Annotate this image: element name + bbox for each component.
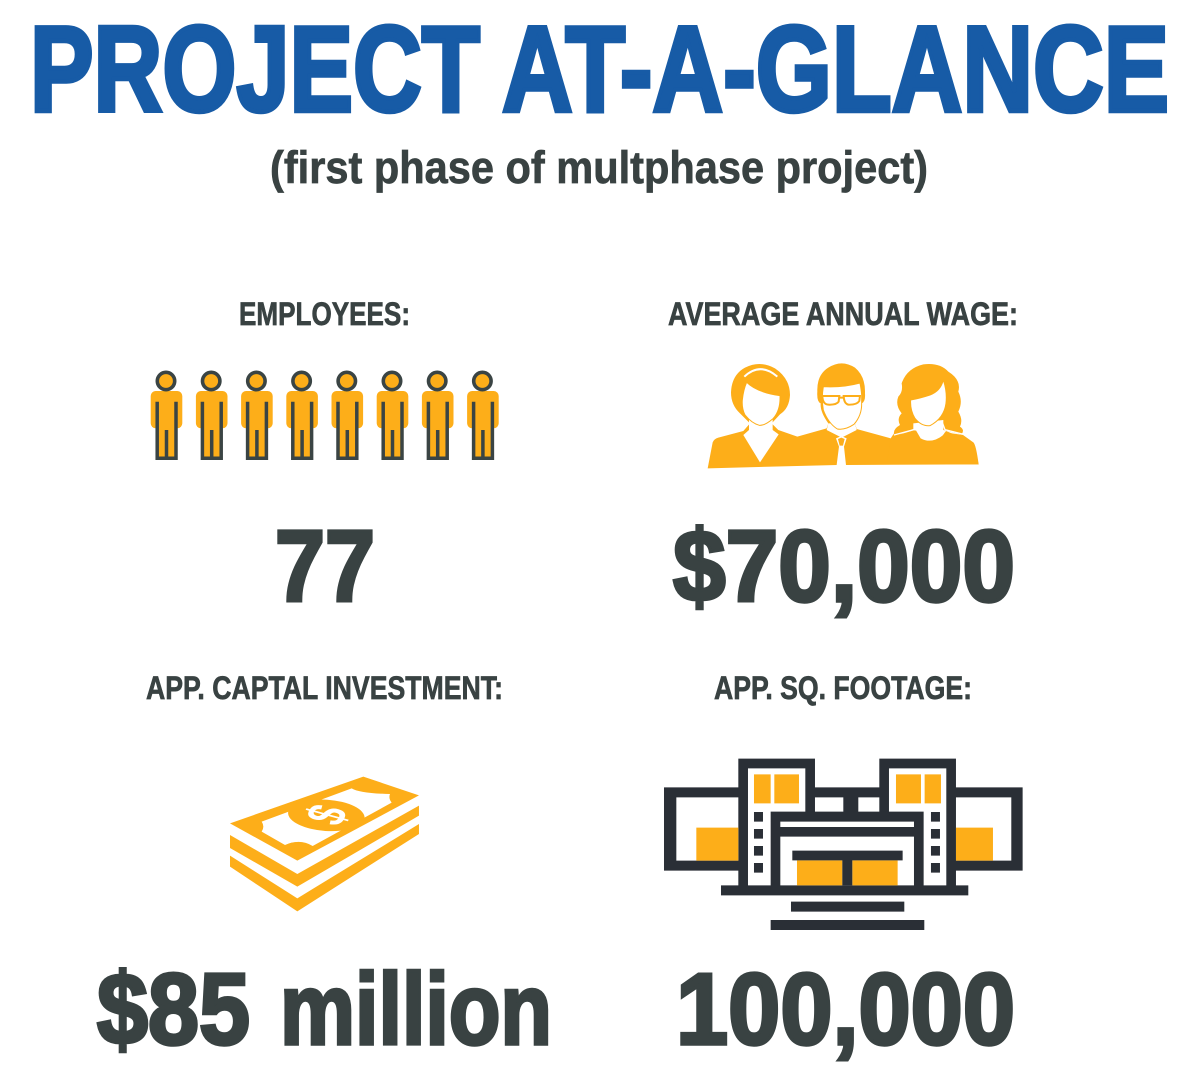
- icon: building: [664, 759, 1023, 930]
- value: investment: million: [280, 954, 552, 1066]
- heading: employees: EMPLOYEES:: [239, 296, 410, 332]
- panel: capital investment: [97, 670, 552, 1066]
- icon: three professionals: [708, 363, 979, 468]
- heading: wage: AVERAGE ANNUAL WAGE:: [668, 296, 1018, 332]
- value: investment: [97, 954, 552, 1066]
- glasses: [822, 396, 860, 405]
- value: footage: 100,000: [676, 954, 1015, 1066]
- title: PROJECT: [30, 1, 480, 137]
- heading: footage: APP. SQ. FOOTAGE:: [714, 670, 972, 706]
- panel: average annual wage: [668, 296, 1018, 623]
- heading: investment: APP. CAPTAL INVESTMENT:: [146, 670, 503, 706]
- dollar sign: $: [294, 799, 361, 831]
- panel: square footage: [664, 670, 1023, 1066]
- title: [30, 1, 1169, 137]
- value: investment: $85: [97, 954, 250, 1066]
- value: employees: 77: [275, 511, 375, 623]
- woman neckline: [887, 430, 979, 464]
- icon: eight people: [151, 372, 499, 458]
- panel: employees: [151, 296, 499, 623]
- subtitle: (first phase of multphase project): [270, 142, 928, 193]
- hair band: [744, 369, 777, 377]
- icon: stack of money: [230, 777, 419, 911]
- value: wage: $70,000: [673, 511, 1015, 623]
